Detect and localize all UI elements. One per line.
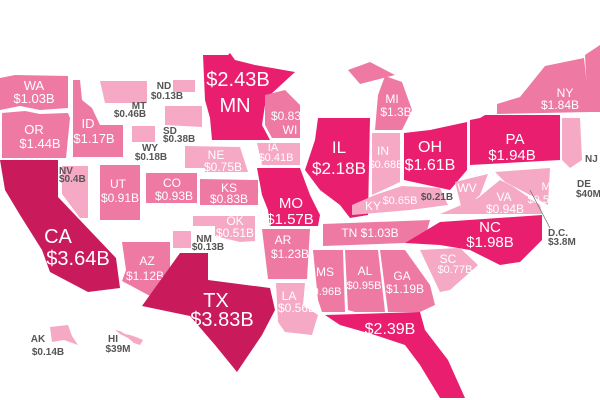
state: NC: $1.98B [466,234,514,251]
state: VA: VA [496,190,512,204]
state: NM: NM [196,234,212,245]
state: OK: OK [226,214,244,228]
state: KY: KY [365,199,381,213]
state: MI [348,62,412,130]
state: MS: $0.96B [307,286,341,298]
state: OK: $0.51B [216,226,254,240]
state: CA: $3.64B [46,248,110,270]
state: IN [369,133,403,195]
state: MT: $0.46B [114,109,146,120]
state: NV: $0.4B [59,174,86,185]
state: IN: IN [377,144,389,158]
state: CA [0,160,120,292]
state: ND [151,80,195,102]
state: MT [100,81,147,120]
state: PA [470,115,560,165]
state: HI: HI [108,334,118,345]
state: UT [100,165,140,220]
state: SD: SD [163,126,177,137]
region: New England [585,45,600,112]
state: WY [132,126,167,163]
state: AL: AL [358,264,373,278]
state: ND: ND [157,81,171,92]
state: IL [305,118,370,218]
state: OR [2,111,70,158]
state: VA [440,180,542,216]
state: NE: $0.75B [204,160,242,174]
state: WA [0,75,68,110]
state: LA: $0.56B [278,301,316,315]
state: KS: $0.83B [210,192,248,206]
state: GA: GA [393,269,411,283]
state: OH [404,122,467,190]
state: AR: $1.23B [271,247,309,261]
state: AR: AR [275,233,292,247]
state: OH: $1.61B [405,157,455,174]
state: MO: MO [279,195,303,212]
state: AK: AK [31,334,46,345]
state: HI: $39M [105,344,131,355]
state: NE: NE [208,148,224,162]
state: NM: $0.13B [192,242,224,253]
state: OR: OR [24,122,44,137]
state: VA: $0.94B [486,202,524,216]
state: CA: CA [44,226,73,248]
state: NV [59,166,88,218]
state: IA [257,142,300,165]
state: IL: IL [332,138,346,157]
state: HI [105,330,143,355]
state: IN: $0.68B [369,159,403,171]
state: MD: MD [541,181,559,193]
state: TX: TX [203,290,229,312]
state: WI: WI [283,123,297,137]
state: TN: TN $1.03B [341,226,399,240]
state: GA: $1.19B [386,282,424,296]
state: MS [307,250,345,312]
state: PA: PA [506,131,524,148]
state: SC [420,248,478,292]
state: WI: $0.83B [271,109,309,123]
state: TX [142,253,275,372]
state: ID: ID [82,116,94,131]
state: WV: $0.21B [421,192,453,203]
state: SD [163,106,202,145]
state: MD [495,168,562,206]
state: WY: WY [142,143,158,154]
state: IA: $0.41B [259,152,293,164]
state: KY: $0.65B [383,195,417,207]
state: MI: MI [385,92,399,106]
state: NM [173,231,224,253]
state: MI: $1.3B [380,105,412,119]
state: NV: NV [59,166,73,177]
state: SC: $0.77B [438,264,472,276]
state: AZ [122,242,170,296]
state: NE [185,146,248,174]
state: UT: UT [110,177,127,191]
state: MN: MN [219,95,251,117]
state: AL [345,250,385,312]
state: NY: $1.84B [541,98,579,112]
state: OH: OH [418,139,442,156]
state: WV: WV [457,181,477,195]
state: LA: LA [282,289,296,303]
state: SD: $0.38B [163,134,195,145]
label: D.C. [530,190,576,248]
state: WY: $0.18B [135,152,167,163]
state: ID [73,80,123,157]
state: KS [200,179,258,206]
state: WA: WA [24,78,45,93]
state: KS: KS [221,181,237,195]
label: D.C.: D.C. [548,228,568,239]
label: DE: DE [577,179,591,190]
state: MD: $0.58B [528,194,562,206]
state: IA: IA [268,142,279,154]
state: PA: $1.94B [488,147,536,164]
state: CO [146,173,197,203]
state: NY: NY [557,86,573,100]
state: UT: $0.91B [101,191,139,205]
label: D.C.: $3.8M [548,237,576,248]
state: NY [497,58,590,114]
state: MO [257,168,320,228]
state: NJ: NJ [585,154,598,165]
state: KY [352,186,448,215]
state: FL: $2.39B [365,321,415,338]
state: MO: $1.57B [266,211,314,228]
state: LA [276,283,318,335]
state: MN: $2.43B [206,69,270,91]
state: CO: $0.93B [155,189,193,203]
state: MT: MT [132,101,146,112]
state: AK: $0.14B [32,347,64,358]
state: NC [405,215,542,265]
state: AZ: $1.12B [126,269,164,283]
label: DE [576,179,600,200]
state: WV [421,174,488,210]
state: ND: $0.13B [151,91,183,102]
state: AK [31,325,78,358]
state: NC: NC [479,219,501,236]
state: AR [262,229,310,279]
state: AZ: AZ [139,254,155,268]
state: TX: $3.83B [190,309,254,331]
state: ID: $1.17B [73,131,115,146]
state: GA [380,250,435,312]
state: IL: $2.18B [312,159,366,178]
state: WA: $1.03B [13,91,55,106]
state: MN [203,53,295,140]
state: TN [323,220,430,246]
state: MS: MS [316,265,334,279]
state: WI [265,90,309,138]
state: SC: SC [440,252,457,266]
state: AL: $0.95B [347,280,381,292]
state: OK [193,214,255,242]
state: NJ [562,118,598,168]
state: FL: FL [391,343,409,360]
state: OR: $1.44B [19,136,61,151]
state: FL [325,312,465,398]
state: CO: CO [163,176,181,190]
